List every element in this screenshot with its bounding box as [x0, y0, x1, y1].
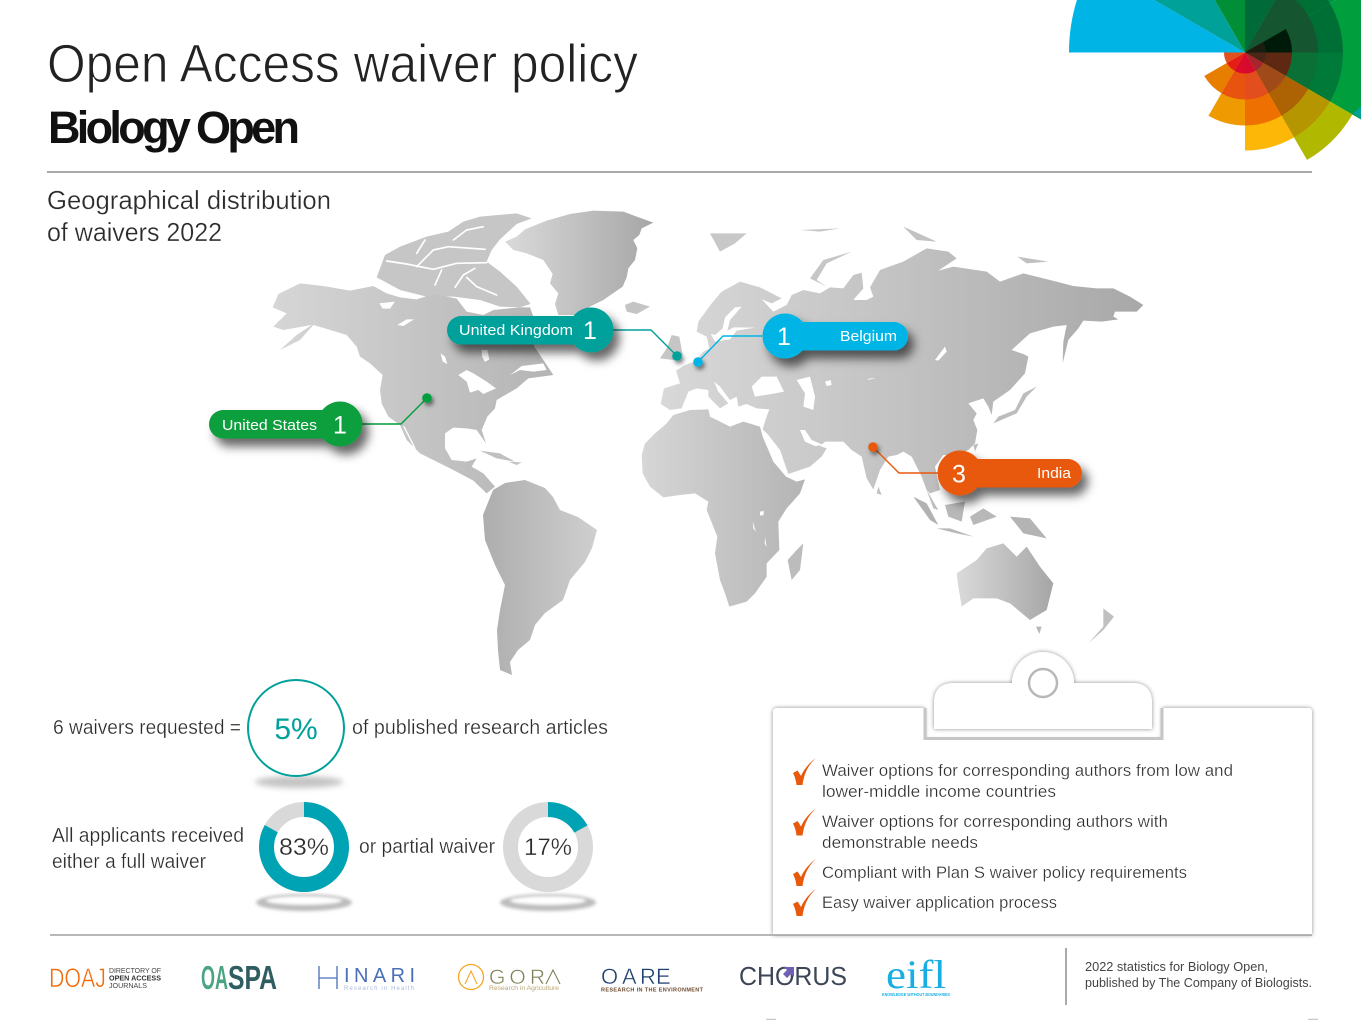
callout: Belgium	[693, 314, 908, 367]
check mark 1	[793, 758, 816, 785]
title: Biology Open	[48, 102, 300, 153]
stat: waivers requested: 5%	[274, 713, 318, 746]
clip hole	[1029, 669, 1057, 697]
stat: waivers requested: 6 waivers requested =	[53, 717, 241, 739]
title: Open Access waiver policy	[47, 34, 638, 94]
logo: CHORUS: CHORUS	[739, 961, 847, 991]
logo: DOAJ	[49, 963, 161, 993]
logo: OASPA: OA	[201, 959, 228, 996]
logo: DOAJ: DIRECTORY OF	[109, 966, 161, 975]
logo fan graphic, top right	[1069, 0, 1361, 160]
map: Eurasia, Africa and Oceania	[642, 227, 1143, 643]
callout: Belgium: 1	[777, 323, 791, 351]
feature list text: Compliant with Plan S waiver policy requirements	[822, 863, 1187, 882]
logo: OASPA: SPA	[228, 959, 277, 996]
clip	[934, 652, 1152, 729]
section heading: geographical distribution: Geographical distribution	[47, 185, 331, 215]
donut chart: 83%	[256, 810, 352, 911]
section heading: geographical distribution	[47, 185, 331, 247]
logo: OARE: OARE	[601, 964, 671, 989]
callout: United Kingdom: 1	[583, 317, 597, 345]
callout: United States: United States	[222, 417, 317, 434]
feature list text: Waiver options for corresponding authors with	[822, 812, 1168, 831]
logo: DOAJ: JOURNALS	[109, 981, 147, 990]
stat: waivers requested	[53, 680, 608, 788]
feature list text: Easy waiver application process	[822, 893, 1057, 912]
logo: eifl: KNOWLEDGE WITHOUT BOUNDARIES	[882, 992, 950, 997]
stat: waivers requested: of published research articles	[352, 717, 608, 739]
logo: DOAJ: DOAJ	[49, 963, 106, 993]
source note: published by The Company of Biologists.	[1085, 975, 1312, 990]
map: Americas and Greenland	[273, 211, 653, 675]
logo: OARE	[601, 964, 704, 994]
feature list text: Waiver options for corresponding authors from low and	[822, 761, 1233, 780]
callout: United States	[209, 393, 432, 446]
logo: AGORA	[458, 964, 560, 992]
logo: HINARI: INARI	[344, 965, 415, 987]
donut chart: 17%	[500, 810, 596, 911]
logo: OASPA	[201, 959, 277, 996]
feature list text: demonstrable needs	[822, 833, 978, 852]
check mark 3	[793, 859, 816, 886]
logo: eifl: eifl	[886, 952, 946, 997]
title	[47, 34, 638, 153]
logo: AGORA: Research in Agriculture	[489, 985, 559, 992]
donut chart: 17%: 17%	[524, 834, 572, 861]
source note	[1085, 959, 1312, 990]
logo: DOAJ: OPEN ACCESS	[109, 974, 161, 982]
panel: clipboard of waiver policy features	[773, 652, 1312, 935]
logo: HINARI	[319, 965, 415, 992]
source note: 2022 statistics for Biology Open,	[1085, 959, 1268, 974]
callout: United States: 1	[333, 412, 347, 440]
world map	[273, 211, 1143, 675]
text: all applicants received either a full waiver: either a full waiver	[52, 851, 206, 873]
check mark 4	[793, 889, 816, 916]
check mark 2	[793, 808, 816, 836]
callout: India: India	[1037, 465, 1072, 482]
logo: AGORA: GOR	[489, 966, 545, 989]
text: all applicants received either a full waiver	[52, 825, 244, 873]
section heading: geographical distribution: of waivers 2022	[47, 217, 222, 247]
feature list text	[822, 761, 1233, 912]
callout: United Kingdom: United Kingdom	[459, 322, 573, 339]
text: all applicants received either a full waiver: All applicants received	[52, 825, 244, 847]
donut chart: 83%: 83%	[279, 834, 329, 861]
logo: HINARI: Research in Health	[344, 986, 414, 992]
text: or partial waiver: or partial waiver	[359, 836, 495, 858]
callout: Belgium: Belgium	[840, 328, 897, 345]
feature list text: lower-middle income countries	[822, 782, 1056, 801]
callout: India	[868, 442, 1082, 496]
callout: United Kingdom	[447, 308, 682, 361]
callout: India: 3	[952, 460, 966, 488]
logo: OARE: RESEARCH IN THE ENVIRONMENT	[601, 988, 704, 994]
